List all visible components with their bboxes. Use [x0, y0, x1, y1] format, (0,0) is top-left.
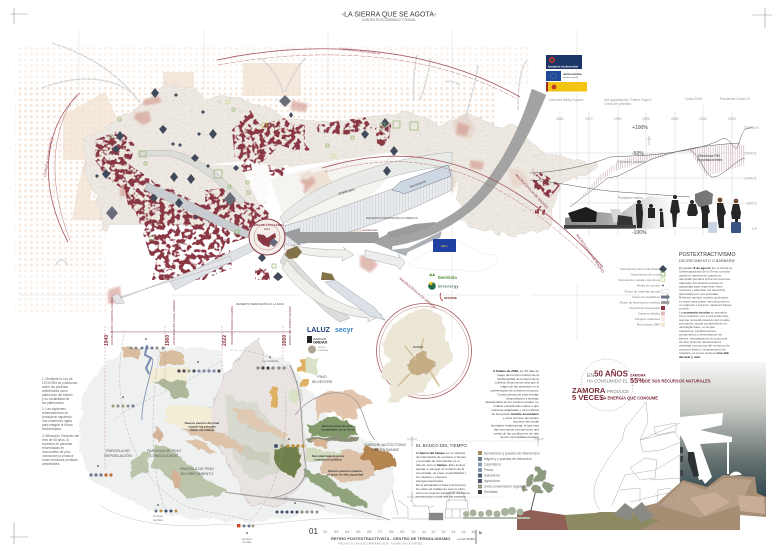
left text notes: reforestadas en [42, 446, 64, 450]
left text notes: y su vocabilidad de [42, 397, 69, 401]
central paragraph: vuelta de las condiciones de vida [494, 431, 539, 435]
funding logos: UNIÓN EUROPEA [563, 73, 582, 76]
madrid circle map [376, 277, 472, 402]
postextractivismo paragraph: del azar y vivir. [679, 355, 701, 359]
timeline with dates: DESPOBLACIÓN RURAL ZAMORA [171, 300, 176, 345]
body text: los vales de trabajo de este modelo, [416, 487, 466, 491]
forest fire clusters (burnt areas) [95, 110, 560, 280]
northern map region [84, 83, 598, 330]
page numbers: 05 [356, 529, 361, 534]
line chart: 10000 € [744, 176, 756, 180]
lower map labels: SILVESTRE [312, 380, 333, 384]
lower map labels: MARCHE AUTÓCTONO [364, 442, 406, 447]
line chart: 2500 € [746, 202, 756, 206]
funding logos: NextGenerationEU [563, 76, 579, 79]
page numbers [309, 527, 476, 536]
hatched flow bands toward culebra circle [280, 152, 452, 322]
thin outward flow lines [42, 43, 527, 265]
timeline with dates: 2050 [282, 335, 288, 346]
small company logos: secyr [335, 327, 354, 334]
lower map labels: vacías sin manejo [190, 428, 215, 432]
red arc: cornisa cantabrica left [43, 93, 80, 242]
statistics callout: PRODUCE [607, 389, 629, 394]
left text notes: monocultivo de pino [42, 450, 71, 454]
central paragraph: Culebra. Esta fuerza reza que el [495, 381, 539, 385]
map legend: Yacimientos metales preciosos [618, 278, 660, 282]
legend: Zona conservación vegetación [484, 484, 529, 488]
left text notes: reforestaciones se [42, 411, 68, 415]
lower map labels: Nuevos puertos del pinar [185, 421, 220, 425]
timeline with dates: BANCO DEL TIEMPO SIERRA [288, 306, 292, 345]
energy company logos: Greenergy [438, 284, 459, 288]
left text notes: produjeron siguiendo [42, 415, 72, 419]
pump jack dark gradient [680, 362, 766, 500]
line chart: -100% [632, 230, 647, 236]
legend: Senderismo y puestos de intervención [484, 452, 540, 456]
body text: ayudar a manejar un territorio de la [416, 467, 464, 471]
red arc: macrocefalia de madrid: MACROCEFALIA DE MADRID [575, 233, 605, 274]
red arc: macrocefalia de madrid: MACROCEFALIA DE MADRID [514, 173, 549, 210]
map legend: Zonas pobladas [638, 312, 660, 316]
statistics callout: 5 VECES [572, 393, 604, 402]
central paragraph: y otros cuerpos del campo [503, 416, 539, 420]
red arc: macrocefalia de madrid [322, 156, 605, 274]
page numbers: 11 [422, 529, 427, 534]
left text notes: rocas versiones perdidas [42, 458, 78, 462]
line chart: 1995 [642, 117, 650, 121]
page numbers: 07 [378, 529, 383, 534]
central paragraph: conservación de nuestros recursos. [490, 388, 539, 392]
red arc: cornisa cantabrica top [217, 47, 520, 99]
line chart: Población ocupada [617, 160, 646, 164]
lower map labels: CONSOLIDADO [150, 454, 178, 458]
lower map labels: EN CRECIMIENTO [181, 472, 213, 476]
left text notes: 1. Mediante la Ley de [42, 377, 73, 381]
mining and permit markers [95, 88, 398, 281]
body text: los mejores y mayores [416, 475, 447, 479]
big grey arrow [372, 89, 546, 271]
page numbers: 15 [461, 529, 466, 534]
line chart: Informes Bailly-Dupont [549, 98, 583, 102]
line chart: +100% [632, 125, 648, 131]
timeline with dates: DESIERTO DEMOGRÁFICO LA RAYA [236, 302, 284, 306]
soil and rocks base [517, 475, 766, 530]
postextractivismo paragraph: Reforzar nuestro modelo productivo [679, 296, 728, 300]
lower map labels: La Carballeda [262, 359, 279, 363]
page numbers: 04 [345, 529, 350, 534]
small company logos: LALUZ [307, 327, 331, 334]
statistics callout: EN [587, 373, 594, 379]
postextractivismo paragraph: no ingresar a 'bancos' nacional 'bases' [679, 303, 732, 307]
postextractivismo paragraph: La economía circular se presenta [679, 310, 727, 314]
hatched flow bands toward culebra circle: 87630 pers [338, 187, 356, 196]
project footer: RETIRO POSTEXTRACTIVISTA . CENTRO DE TERMOLUDISMO [331, 536, 450, 541]
legend: Carpinteros [484, 462, 501, 466]
body text: como se mejoran trabajando durante la [416, 491, 470, 495]
dot strings (community resources) [89, 338, 319, 534]
line chart: 1950 [556, 117, 564, 121]
left text notes: convocaron a producir [42, 454, 74, 458]
body text: de intercambio de servicios y bienes [416, 455, 466, 459]
line chart: 2020 [728, 117, 736, 121]
body text [416, 451, 470, 498]
culebra circle seal: SIERRA DE LA CULEBRA [250, 223, 284, 227]
central paragraph: ilustrativo fundamental, al que esta [491, 424, 539, 428]
central paragraph: A finales de 2022, los 15 días de [493, 369, 539, 373]
left text notes: mes de 50 años, la [42, 438, 69, 442]
green squares [110, 100, 418, 268]
line chart: -50% [632, 151, 644, 157]
lower map labels: de Aliste [153, 518, 163, 522]
postextractivismo paragraph: demanda humana sobre los recursos [679, 277, 731, 281]
statistics callout [572, 359, 711, 411]
postextractivismo paragraph: capacidad para regenerar estos [679, 284, 723, 288]
line chart: 0 € [752, 227, 757, 231]
lower map labels: en áreas de alta capacidad [327, 472, 364, 476]
red arc: cornisa cantabrica top: CORNISA CANTÁBRICA [340, 47, 381, 55]
statistics callout: DE SUS RECURSOS NATURALES [645, 378, 711, 384]
timeline with dates: 1960 [165, 335, 171, 346]
energy company logos: Iberdrola [438, 275, 457, 280]
small company logos: ORDAX [313, 340, 328, 344]
postextractivismo heading [679, 252, 736, 263]
energy company logos [428, 273, 459, 301]
postextractivismo paragraph: generados por esa actividad. [679, 292, 719, 296]
postextractivismo paragraph: supone la transformación del modelo [679, 318, 730, 322]
lower map labels: ocupan las parcelas [188, 424, 216, 428]
postextractivismo paragraph: desplegar-base, en la que [679, 325, 715, 329]
central paragraph [486, 369, 539, 439]
lower map labels [104, 359, 406, 544]
lower map labels: Frontera [153, 514, 163, 518]
central paragraph: de Tecumseh modelo económico [492, 412, 539, 416]
map legend: Flujos demográficos [632, 295, 660, 299]
project footer: 1:20000 [464, 537, 475, 541]
tree [521, 467, 553, 515]
central paragraph: recursos del medio [513, 420, 539, 424]
lower map labels: PARCELA DE PINO [147, 449, 181, 453]
postextractivismo paragraph: naturales del planeta excede su [679, 281, 723, 285]
lower map labels: REPOBLACIÓN [104, 453, 132, 458]
left text notes: ambientales como [42, 389, 68, 393]
map legend: Superficies quemadas [629, 306, 660, 310]
map legend: Red natura 2000 [637, 323, 660, 327]
line chart: Pandemia Covid-19 [720, 97, 750, 101]
line chart: 1970 [585, 117, 593, 121]
line chart: Población activa [618, 196, 643, 200]
project footer: PROYECTO FIN DE CARRERA 2024 . ÁLVARO ROJO PÉREZ [338, 540, 423, 546]
timeline with dates: REPOBLACIÓN FORESTAL FRANCO [109, 296, 114, 345]
funding logos: fundación biodiversidad [548, 64, 578, 68]
lower map labels: Densidad baja de pinos [312, 454, 345, 458]
lower map labels: RIBERA SANDE [371, 448, 399, 452]
eu flag [433, 239, 456, 252]
lower map labels: recuperados de la sierra [321, 428, 355, 432]
map legend [618, 265, 670, 327]
timeline with dates: 1940 [104, 335, 110, 346]
project footer: N [479, 531, 482, 535]
small company logos: GARGAS [313, 337, 326, 341]
culebra circle seal [249, 219, 335, 280]
statistics callout: 55% [630, 376, 645, 385]
left text notes: 3. Afloración. Después del [42, 434, 79, 438]
madrid circle map: MADRID [413, 345, 423, 349]
central paragraph: abandonado de los campos rurales, un [486, 400, 539, 404]
left text notes: sucesión de parcelas [42, 442, 72, 446]
map legend: Minas sin control [637, 284, 660, 288]
central paragraph: despoblación y sustrato [506, 396, 539, 400]
left text notes: 2. Las siguientes [42, 407, 66, 411]
small company logos [307, 327, 354, 354]
lower map labels: de Alba [243, 540, 252, 544]
olive row [463, 507, 530, 519]
eu flag: EEU [441, 244, 448, 248]
legend: Pesca [484, 468, 493, 472]
postextractivismo paragraph: residuos, el nuevo sistema vive allá [679, 351, 729, 355]
pink urban patches [108, 96, 484, 304]
project footer [331, 530, 482, 546]
left text notes: ambientales. [42, 462, 60, 466]
postextractivismo paragraph: a renta. [679, 307, 690, 311]
central paragraph: teje una nueva economía de una [494, 428, 539, 432]
lower map roads and routes [115, 330, 390, 520]
central paragraph: Consecuencia de esta verdad: [497, 392, 539, 396]
body text: y la unidad de intercambio es el [416, 459, 460, 463]
line chart: Crisis del petróleo [604, 102, 631, 106]
postextractivismo paragraph: económico actual circularmente en [679, 322, 727, 326]
statistics callout: 50 AÑOS [594, 370, 629, 378]
page numbers: 06 [367, 529, 372, 534]
title: ◦LA SIERRA QUE SE AGOTA◦ [342, 12, 436, 18]
lower map outline base [78, 348, 395, 526]
lower map labels: PARCELA DE PINO [180, 467, 214, 471]
body text: construcción y más allá del proyecto. [416, 494, 467, 498]
postextractivismo paragraph: bienes, reemplazando la economía [679, 336, 727, 340]
page numbers: 03 [334, 529, 339, 534]
left text notes: los patrimonios. [42, 401, 64, 405]
legend [478, 451, 540, 494]
lower map labels: PARCELA DE [106, 449, 130, 453]
map legend: Yacimientos de cerca [631, 273, 660, 277]
body text: comunidad, de crear sostenibilidad y [416, 471, 467, 475]
page numbers: 16 [471, 529, 476, 534]
map legend: Flujos de materias primas [625, 289, 660, 293]
statistics callout: ZAMORA [630, 374, 646, 378]
culebra circle seal: 2022 [264, 227, 271, 231]
map legend: Flujos de financiación pública [620, 300, 660, 304]
small company logos: GRUPO [318, 347, 326, 349]
left text notes: patrimonio del estado [42, 393, 73, 397]
madrid circle map: MACROCEFALIA DE MADRID [398, 277, 437, 310]
postextractivismo paragraph: circular propone desvincular la [679, 340, 721, 344]
lower map labels: PINO [317, 375, 327, 379]
page numbers: 09 [400, 529, 405, 534]
dotted background field [15, 47, 530, 315]
postextractivismo heading: DECRECIMIENTO O BARBARIE [679, 259, 736, 263]
legend: Rentistas [484, 490, 498, 494]
central paragraph: maneras adaptadas y cómo afirma [491, 408, 539, 412]
postextractivismo heading: POSTEXTRACTIVISMO [679, 252, 736, 258]
line chart: 1990 [614, 117, 622, 121]
left text notes: para integrar la futura [42, 423, 73, 427]
body text: En la actualidad el banco del tiempo [416, 483, 466, 487]
line chart: Crisis 2008 [685, 97, 702, 101]
lower map labels: Frontera [242, 537, 252, 541]
timeline with dates [104, 296, 292, 470]
legend: Miguel y y puestos de extracción [484, 457, 532, 461]
body text: intergeneracionales. [416, 479, 444, 483]
energy company logos: acciona [444, 296, 457, 300]
heading: EL BANCO DEL TIEMPO [416, 443, 467, 448]
body text: El banco del tiempo es un sistema [416, 451, 465, 455]
page numbers: 13 [441, 529, 446, 534]
central paragraph: de las comunidades locales. [500, 435, 539, 439]
central paragraph: modelo extractivista vuelve a que [493, 404, 539, 408]
line chart: Diferencia PIB [698, 154, 720, 158]
central paragraph: origen de las protestas en la [500, 385, 539, 389]
small company logos: FORESTAL [318, 349, 329, 352]
title: CONTEXTO ECONÓMICO Y SOCIAL [362, 17, 416, 22]
machinery line drawings [392, 490, 469, 520]
project footer: escala [457, 538, 465, 541]
central paragraph: biodiversidad de la sierra de la [497, 377, 539, 381]
left text notes: 1972/1994 se posicionan [42, 381, 78, 385]
postextractivismo paragraph: El pasado 8 de agosto fue el día de la [679, 266, 732, 270]
line chart [530, 97, 759, 236]
statistics callout: LA ENERGÍA QUE CONSUME [601, 396, 658, 400]
line chart: 2005 [699, 117, 707, 121]
line chart: 2000 [671, 117, 679, 121]
page numbers: 08 [389, 529, 394, 534]
banco del tiempo panel [407, 436, 544, 502]
postextractivismo paragraph: Sobrecapacidad de la Tierra: una día [679, 270, 730, 274]
postextractivismo paragraph: extraemos, transformamos, [679, 329, 717, 333]
line chart: Exportación/mes [697, 158, 723, 162]
lower map labels: explotación pública [315, 458, 342, 462]
pump jack silhouette [594, 402, 742, 510]
line chart: 2000,00 € [744, 126, 759, 130]
hatched flow bands toward culebra circle: Movilización [409, 179, 427, 189]
left text notes [42, 377, 79, 466]
postextractivismo paragraph: actividad económica del consumo de [679, 344, 730, 348]
body text: directo, sino el tiempo. Esto incluye [416, 463, 466, 467]
page numbers: 02 [323, 529, 328, 534]
postextractivismo paragraph: recursos finitos y la generación de [679, 347, 726, 351]
left text notes: una cuadrícula rígida [42, 419, 72, 423]
map legend: Yacimientos ricos industriales [619, 267, 660, 271]
lower map land parcels [120, 338, 395, 508]
postextractivismo paragraph [679, 266, 732, 359]
statistics callout: HA CONSUMIDO EL [587, 378, 629, 384]
postextractivismo paragraph: recursos y absorber los desechos [679, 288, 726, 292]
photo strip: migration [564, 190, 741, 233]
hatched flow bands toward culebra circle: DESIERTO DEMOGRÁFICO IBÉRICO [366, 215, 419, 220]
postextractivismo paragraph: donde lo representó cuando la [679, 273, 721, 277]
timeline with dates: 2022 [222, 335, 228, 346]
line chart: 15000 € [744, 152, 756, 156]
left text notes: sobre las pérdidas [42, 385, 68, 389]
flow band: galicia to culebra [112, 150, 255, 304]
legend: Ganadería [484, 474, 500, 478]
funding logos [546, 55, 587, 92]
page numbers: 14 [451, 529, 456, 534]
red arc: cornisa cantabrica left: CORNISA CANTÁBRICA [43, 136, 54, 177]
postextractivismo paragraph: como solución, por a ésa tendencia, [679, 314, 729, 318]
postextractivismo paragraph: es clave para pasar menos/consumo [679, 299, 730, 303]
map legend: Parques naturales [635, 317, 660, 321]
page numbers: 10 [411, 529, 416, 534]
legend: Agricultura [484, 479, 500, 483]
lower map labels: Nuevos puestos madera [328, 469, 362, 473]
statistics callout: ZAMORA [572, 386, 606, 395]
page numbers: 12 [431, 529, 436, 534]
reference grid lines [20, 30, 640, 340]
hatched flow bands toward culebra circle: vaciado/ador [362, 228, 378, 232]
line chart: Ant agrarización "Fiebre Expen" [604, 98, 653, 102]
page numbers: 01 [309, 527, 318, 536]
postextractivismo paragraph: consumimos y desechamos los [679, 333, 722, 337]
central paragraph: fuego dentro del corazón de la [497, 373, 539, 377]
hatched difference area in chart [578, 144, 745, 200]
title [342, 12, 436, 22]
left text notes: biodiversidad. [42, 427, 62, 431]
timeline with dates: INCENDIO SIERRA CULEBRA [230, 306, 234, 345]
peach blocks [63, 63, 301, 220]
lower map labels: Barrera verde de pinos [322, 424, 354, 428]
